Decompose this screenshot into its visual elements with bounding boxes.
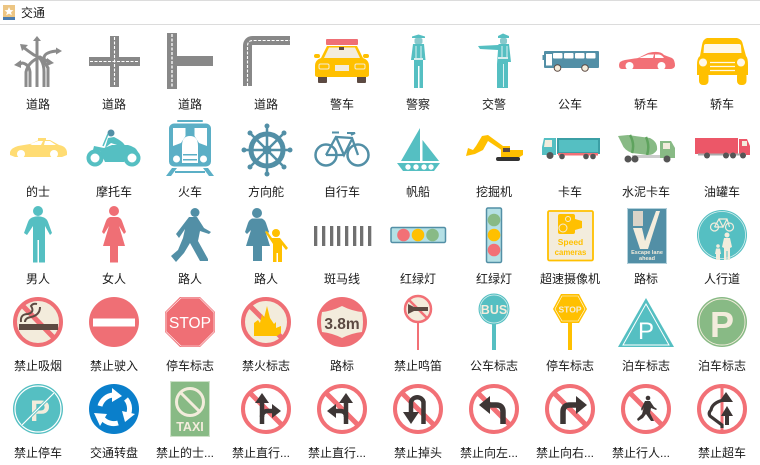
label: 禁火标志 <box>242 359 290 373</box>
label: 挖掘机 <box>476 184 512 199</box>
icon: no smoking <box>15 299 61 345</box>
item: yellow car <box>697 38 748 112</box>
icon: library star <box>3 5 15 20</box>
label: 自行车 <box>324 184 360 199</box>
label: 路标 <box>634 271 658 286</box>
item: T junction <box>167 33 213 112</box>
label: 摩托车 <box>96 184 132 199</box>
item: no taxi <box>156 381 214 460</box>
label: 红绿灯 <box>400 271 436 286</box>
icon: no straight or right <box>243 386 289 432</box>
label: 路人 <box>178 271 202 286</box>
label: 泊车标志 <box>698 358 746 373</box>
item: zebra crossing <box>314 226 371 286</box>
item: woman <box>102 206 126 286</box>
label: 油罐车 <box>704 184 740 199</box>
item: no smoking <box>14 299 62 373</box>
item: no honking <box>394 296 442 373</box>
icon: speed camera sign: cameras <box>555 248 587 257</box>
label: 斑马线 <box>324 272 360 286</box>
icon: no right turn <box>547 386 593 432</box>
item: no U-turn <box>394 386 442 460</box>
label: 道路 <box>26 96 50 112</box>
label: 交警 <box>482 96 506 112</box>
item: taxi <box>10 138 67 199</box>
item: no overtaking <box>698 386 746 460</box>
item: bus stop sign <box>470 294 518 373</box>
item: police officer <box>406 34 430 112</box>
label: 女人 <box>102 271 126 286</box>
icon: bus stop sign: BUS <box>481 303 507 317</box>
icon: no taxi sign: TAXI <box>176 420 204 434</box>
icon: woman <box>102 206 126 262</box>
label: 路标 <box>330 358 354 373</box>
item: stop sign <box>165 297 215 373</box>
label: 禁止超车 <box>698 445 746 460</box>
icon: no pedestrians <box>623 386 669 432</box>
item: bicycle <box>316 132 368 199</box>
item: truck <box>542 138 599 199</box>
label: 的士 <box>26 184 50 199</box>
icon: tanker truck <box>695 138 750 158</box>
label: 禁止向右... <box>536 445 594 460</box>
header <box>3 5 45 20</box>
icon: bicycle <box>316 132 368 166</box>
item: no parking <box>13 384 63 460</box>
icon: shared path sign <box>697 210 747 260</box>
label: 交通转盘 <box>90 445 138 460</box>
icon: parking triangle: P <box>638 318 654 345</box>
item: ship wheel <box>242 124 292 199</box>
label: 火车 <box>178 184 202 199</box>
icon: no fire <box>243 299 289 345</box>
item: motorcycle <box>88 130 138 199</box>
icon: motorcycle <box>88 130 138 164</box>
icon: yellow car front <box>697 38 748 85</box>
item: escape lane sign <box>627 208 667 286</box>
label: 公车标志 <box>470 358 518 373</box>
label: 禁止行人... <box>612 446 670 460</box>
label: 禁止直行... <box>232 446 290 460</box>
item: traffic officer <box>478 34 511 112</box>
icon: no straight or left <box>319 386 365 432</box>
icon: sailboat <box>397 128 440 171</box>
label: 停车标志 <box>546 358 594 373</box>
icon: escape lane sign: Escape lane <box>631 250 663 256</box>
icon: road arrows <box>14 36 62 87</box>
icon: speed camera sign <box>548 211 593 260</box>
label: 禁止吸烟 <box>14 359 62 373</box>
icon: man <box>24 206 52 262</box>
label: 帆船 <box>406 184 430 199</box>
item: tanker truck <box>695 138 750 199</box>
icon: bus <box>542 51 599 71</box>
item: pedestrian and cycle path <box>697 210 747 286</box>
item: man <box>24 206 52 286</box>
icon: roundabout <box>89 384 139 434</box>
icon: no overtaking <box>699 386 745 432</box>
label: 道路 <box>102 96 126 112</box>
label: 禁止掉头 <box>394 446 442 460</box>
item: crossroad <box>89 36 140 112</box>
item: no straight or left <box>308 386 366 460</box>
icon: excavator <box>466 135 523 161</box>
icon: truck <box>542 138 599 159</box>
label: 超速摄像机 <box>540 271 600 286</box>
icon: ship wheel <box>242 124 292 176</box>
label: 禁止向左... <box>460 445 518 460</box>
item: parking triangle <box>618 298 674 373</box>
label: 道路 <box>254 96 278 112</box>
icon: stop sign: STOP <box>169 315 211 332</box>
item: no entry <box>89 297 139 373</box>
icon: no left turn <box>471 386 517 432</box>
label: 卡车 <box>558 184 582 199</box>
icon: taxi <box>10 138 67 158</box>
icon: no entry <box>89 297 139 347</box>
icon: stop sign on pole: STOP <box>558 304 582 314</box>
label: 红绿灯 <box>476 271 512 286</box>
icon: escape lane sign: ahead <box>639 256 655 262</box>
item: height limit <box>317 297 367 373</box>
item: no fire <box>242 299 290 373</box>
item: no straight or right <box>232 386 290 460</box>
icon: crossroad <box>89 36 140 87</box>
label: 禁止停车 <box>14 445 62 460</box>
label: 方向舵 <box>248 184 284 199</box>
item: no right turn <box>536 386 594 460</box>
item: horizontal traffic light <box>391 228 446 286</box>
icon: zebra crossing <box>314 226 371 246</box>
item: no pedestrians <box>612 386 670 460</box>
icon: no U-turn <box>395 386 441 432</box>
label: 警车 <box>330 96 354 112</box>
item: no left turn <box>460 386 518 460</box>
item: adult and child <box>245 208 288 286</box>
label: 水泥卡车 <box>622 184 670 199</box>
panel title: 交通 <box>21 5 45 20</box>
label: 禁止的士... <box>156 445 214 460</box>
label: 禁止驶入 <box>90 358 138 373</box>
label: 男人 <box>26 272 50 286</box>
label: 轿车 <box>710 96 734 112</box>
label: 禁止鸣笛 <box>394 358 442 373</box>
item: roundabout <box>89 384 139 460</box>
label: 道路 <box>178 96 202 112</box>
icon: police car <box>314 39 369 83</box>
item: excavator <box>466 135 523 199</box>
item: sailboat <box>397 128 440 199</box>
icon: corner road <box>248 40 290 86</box>
item: cement truck <box>618 135 675 199</box>
item: stop sign on pole <box>546 294 594 373</box>
item: police car <box>314 39 369 112</box>
icon: train <box>166 120 214 176</box>
icon: traffic officer <box>478 34 511 88</box>
item: vertical traffic light <box>476 208 512 286</box>
icon: escape lane sign <box>627 208 667 264</box>
icon: T junction <box>167 33 213 89</box>
icon: red sedan <box>619 52 675 70</box>
label: 泊车标志 <box>622 358 670 373</box>
label: 路人 <box>254 271 278 286</box>
label: 警察 <box>406 96 430 112</box>
label: 停车标志 <box>166 358 214 373</box>
label: 人行道 <box>704 272 740 286</box>
item: corner road <box>248 40 290 112</box>
icon: vertical traffic light <box>486 208 502 262</box>
icon: no parking: P <box>30 395 50 428</box>
icon: speed camera sign: Speed <box>558 237 583 247</box>
icon: police officer <box>411 34 426 88</box>
icon: height limit sign: 3.8m <box>324 316 360 333</box>
icon: walking pedestrian <box>171 208 211 262</box>
icon: parking circle: P <box>710 304 734 345</box>
label: 轿车 <box>634 96 658 112</box>
label: 禁止直行... <box>308 446 366 460</box>
item: parking circle <box>697 297 747 373</box>
item: bus <box>542 51 599 112</box>
icon: cement truck <box>618 135 675 162</box>
item: train <box>166 120 214 199</box>
icon: no honking sign <box>405 296 431 350</box>
label: 公车 <box>558 96 582 112</box>
icon: horizontal traffic light <box>391 228 446 242</box>
item: red sedan <box>619 52 675 112</box>
item: speed camera <box>540 211 600 286</box>
item: road junction arrows <box>14 36 62 112</box>
icon: adult and child <box>245 208 288 262</box>
item: pedestrian walking <box>171 208 211 286</box>
